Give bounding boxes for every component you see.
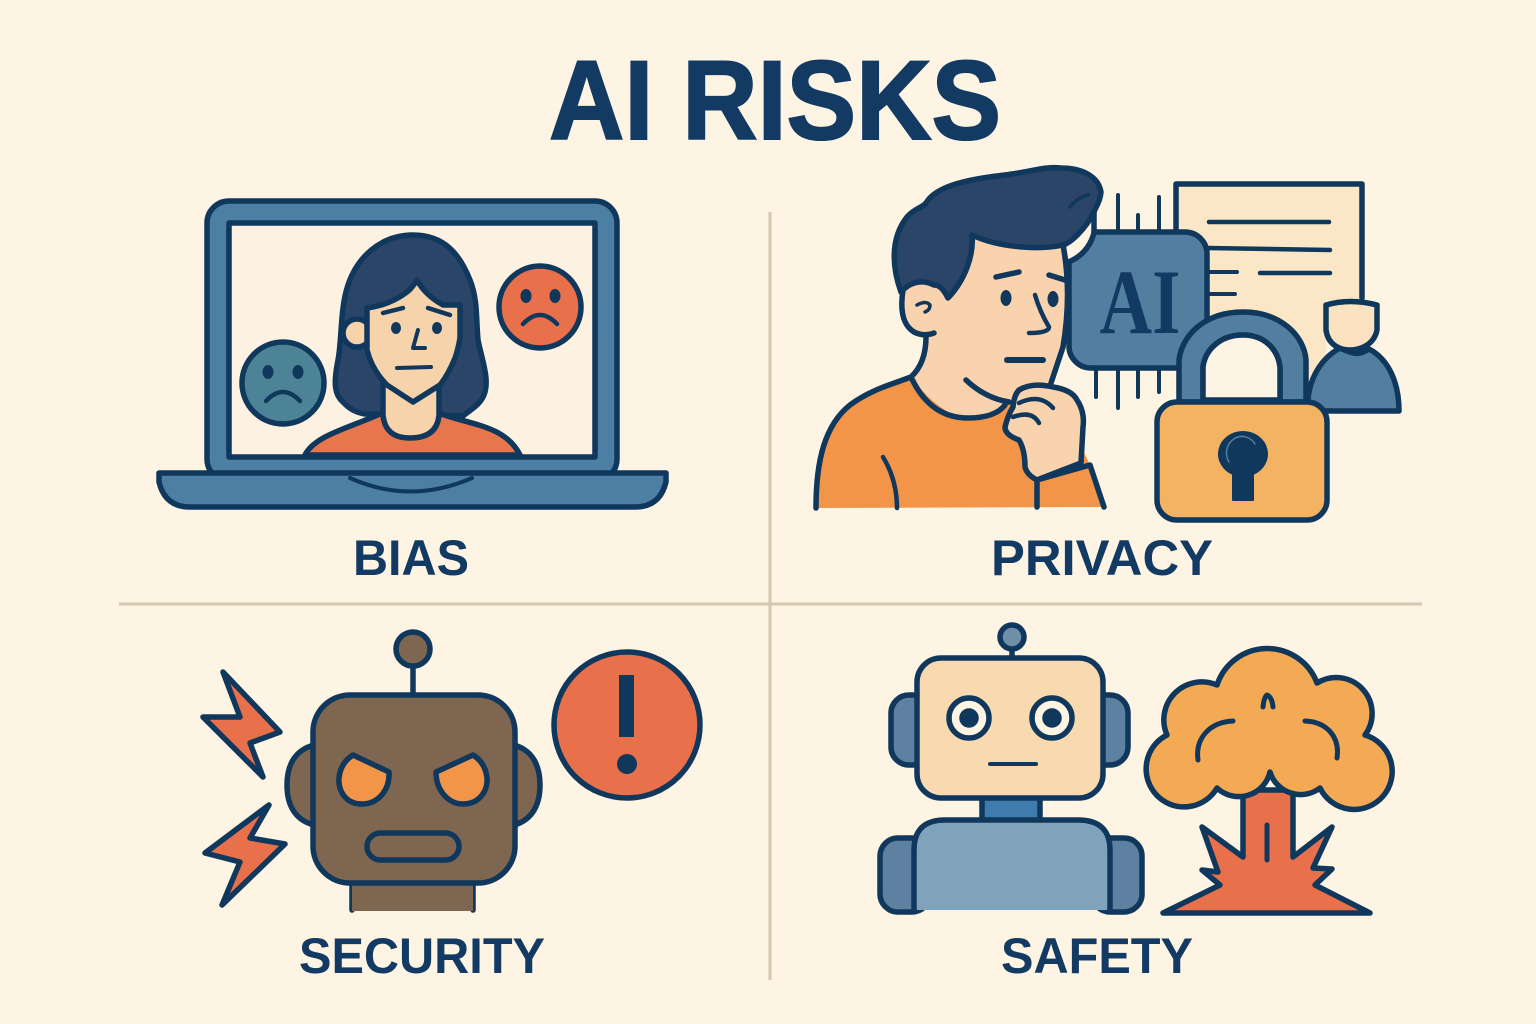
icon: woman	[305, 235, 520, 455]
panel: privacy	[816, 168, 1399, 520]
icon: person silhouette	[1308, 302, 1399, 411]
icon: lightning bottom	[205, 805, 285, 905]
icon: padlock	[1157, 312, 1327, 520]
icon: friendly robot	[880, 625, 1142, 912]
icon: warning	[554, 652, 700, 798]
icon: sad face orange	[499, 266, 581, 348]
panel: security	[203, 632, 700, 911]
label: privacy: PRIVACY	[991, 530, 1213, 586]
label: bias: BIAS	[353, 530, 469, 586]
panel: safety	[880, 625, 1392, 913]
panel: bias	[159, 201, 666, 507]
hair gap	[1063, 212, 1094, 263]
icon: document	[1176, 184, 1362, 394]
icon: explosion	[1146, 649, 1392, 913]
label: safety: SAFETY	[1001, 928, 1193, 984]
label: security: SECURITY	[299, 928, 545, 984]
icon: AI chip: AI	[1100, 251, 1180, 353]
icon: AI chip	[1069, 195, 1237, 408]
icon: lightning top	[203, 672, 280, 777]
icon: laptop	[159, 201, 666, 507]
icon: man	[816, 168, 1104, 508]
icon: evil robot	[287, 632, 540, 911]
icon: sad face blue	[242, 342, 324, 424]
title: AI RISKS	[549, 38, 1001, 163]
